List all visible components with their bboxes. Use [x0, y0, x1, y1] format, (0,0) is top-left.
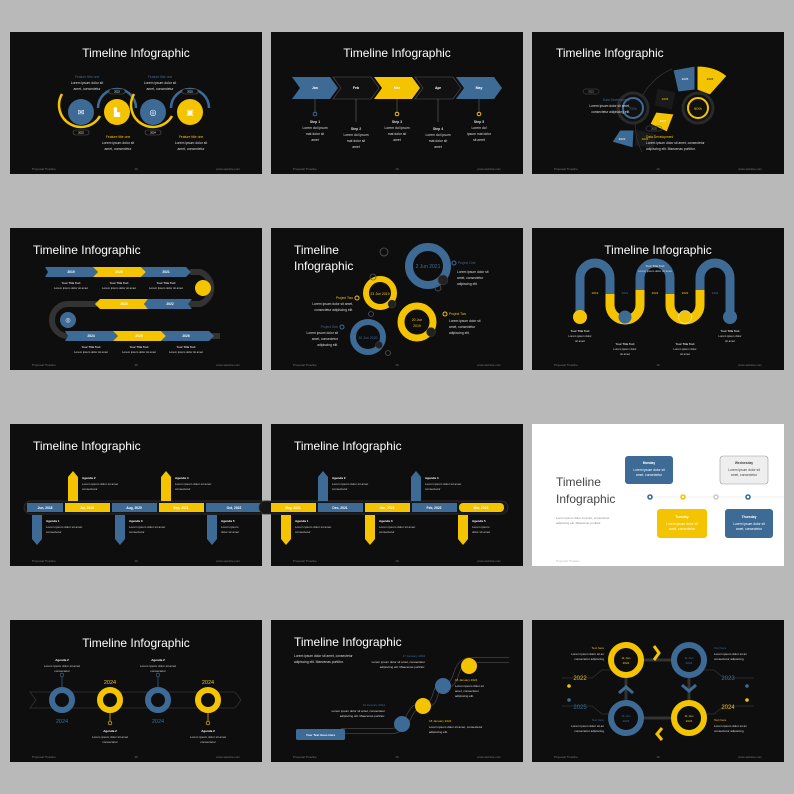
slide 3: gear segments: 2026 [662, 97, 669, 101]
slide 8: agenda bar part 2 [259, 424, 523, 566]
slide 12: four ring cycle [532, 620, 784, 762]
steps text: Lorem dol [471, 126, 487, 130]
title: Timeline Infographic [343, 46, 451, 60]
slide 11: winding road: 17 January 2024 [403, 654, 425, 658]
slide 4: serpentine arrows: ◎ [65, 318, 71, 324]
text blocks: Data Development [646, 135, 673, 139]
slide 9: white weekday timeline: Thursday [742, 515, 757, 519]
arrows [318, 471, 328, 501]
slide 10: ring chain: Lorem ipsum dolor sit amet [44, 664, 80, 668]
slide 11: winding road: adipiscing elit. [455, 694, 474, 698]
slide 9: white weekday timeline: Tuesday [675, 515, 689, 519]
connectors [562, 660, 754, 718]
title: Timeline Infographic [33, 439, 141, 453]
bar [259, 501, 508, 514]
slide 4: serpentine arrows: 2021 [162, 270, 170, 274]
title: Timeline Infographic [294, 439, 402, 453]
slide 4: serpentine arrows: 2020 [115, 270, 123, 274]
slide 7: agenda bar part 1: Jul, 2019 [80, 506, 94, 510]
slide 9: white weekday timeline: Wednesday [735, 461, 753, 465]
slide 5: bubbles: Infographic [294, 259, 353, 273]
slide 6: snake timeline: Your Title Text [616, 342, 635, 346]
slide 4: serpentine arrows: 2023 [120, 302, 128, 306]
slide 12: four ring cycle: 11 Jan [685, 714, 694, 718]
labels: Lorem ipsum dolor sit [306, 331, 338, 335]
steps text [302, 120, 492, 149]
slide 11: winding road: Lorem ipsum dolor sit [455, 684, 484, 688]
title: Timeline Infographic [604, 243, 712, 257]
slide 5: bubbles: 2019 [413, 324, 421, 328]
slide 4: serpentine arrows: 2022 [166, 302, 174, 306]
feature texts: Lorem ipsum dolor sit [175, 141, 207, 145]
slide 9: white weekday timeline: amet, consectetur [736, 527, 763, 531]
feature texts: amet, consectetur [74, 87, 101, 91]
slide 4: serpentine arrows: Lorem ipsum dolor sit amet [149, 286, 183, 290]
slide 8: agenda bar part 2: Agenda 1 [295, 519, 309, 523]
slide 7: agenda bar part 1: Agenda 3 [129, 519, 143, 523]
feature texts: amet, consectetur [147, 87, 174, 91]
slide 9: white weekday timeline: Lorem ipsum dolor sit [728, 468, 760, 472]
circles: ◎ [150, 108, 157, 117]
slide 2: chevron months: Jan [312, 86, 318, 90]
slide 4: serpentine arrows: Lorem ipsum dolor sit amet [74, 350, 108, 354]
slide 12: four ring cycle: 2024 [686, 719, 693, 723]
slide 7: agenda bar part 1: consectetur [175, 487, 191, 491]
slide 8: agenda bar part 2: Agenda 2 [332, 476, 346, 480]
slide 11: winding road: Lorem ipsum dolor sit amet, consectetur [332, 709, 385, 713]
nodes [394, 716, 410, 732]
text blocks: Lorem ipsum dolor sit amet, consectetur [646, 141, 706, 145]
slide 9: white weekday timeline: adipiscing elit. Maecenas porttitor. [556, 521, 601, 525]
slide 7: agenda bar part 1: Lorem ipsum dolor sit amet [175, 482, 211, 486]
track [52, 272, 220, 336]
slide 7: agenda bar part 1: consectetur [46, 530, 62, 534]
slide 10: ring chain: Lorem ipsum dolor sit amet [190, 735, 226, 739]
slide 6: snake timeline: Lorem ipsum dolor [613, 347, 637, 351]
slide 8: agenda bar part 2: Agenda 4 [425, 476, 439, 480]
slide 9: white weekday timeline [532, 424, 784, 566]
slide 9: white weekday timeline: Lorem ipsum dolor sit [733, 522, 765, 526]
nodes [573, 310, 587, 324]
slide 8: agenda bar part 2: Lorem ipsum dolor sit amet [425, 482, 461, 486]
slide 7: agenda bar part 1: Lorem ipsum [221, 525, 239, 529]
slide 6: snake timeline: sit amet [680, 352, 690, 356]
slide 9: white weekday timeline: Lorem ipsum dolor sit [633, 468, 665, 472]
slide 6: snake timeline: 2021 [622, 291, 629, 295]
circles: ▙ [113, 107, 121, 117]
slide 4: serpentine arrows: Lorem ipsum dolor sit amet [122, 350, 156, 354]
slide 8: agenda bar part 2: consectetur [379, 530, 395, 534]
labels: adipiscing elit. [317, 343, 338, 347]
arrows [68, 471, 78, 501]
slide 6: snake timeline: sit amet [575, 339, 585, 343]
slide 4: serpentine arrows: 2019 [67, 270, 75, 274]
slide 8: agenda bar part 2: Agenda 5 [472, 519, 486, 523]
slide 8: agenda bar part 2: May, 2021 [285, 506, 301, 510]
labels: Lorem ipsum dolor sit [449, 319, 481, 323]
steps text: amet [352, 145, 360, 149]
labels [306, 261, 489, 347]
slide 8: agenda bar part 2: Agenda 3 [379, 519, 393, 523]
slide 11: winding road: amet, consectetur [455, 689, 479, 693]
slide 11: winding road: Lorem ipsum dolor sit amet, consectetur [429, 725, 482, 729]
chevron band [30, 692, 241, 708]
slide 8: agenda bar part 2: consectetur [332, 487, 348, 491]
icons [195, 280, 211, 296]
slide 2: chevron months: May [476, 86, 482, 90]
slide 12: four ring cycle: Lorem ipsum dolor sit an [714, 652, 747, 656]
steps text: amet [311, 138, 319, 142]
rings [52, 690, 218, 710]
slide 11: winding road: Lorem ipsum dolor sit amet, consectetur [372, 660, 425, 664]
slide 8: agenda bar part 2: Dec, 2021 [332, 506, 348, 510]
slide 11: winding road: 19 January 2024 [363, 703, 385, 707]
slide 12: four ring cycle: 11 Jan [622, 714, 631, 718]
slide 8: agenda bar part 2: Lorem ipsum dolor sit amet [295, 525, 331, 529]
slide 8: agenda bar part 2: Mar, 2022 [474, 506, 489, 510]
slide 8: agenda bar part 2: Jan, 2022 [380, 506, 395, 510]
labels: amet, consectetur [449, 325, 476, 329]
slide 6: snake timeline: sit amet [620, 352, 630, 356]
slide 12: four ring cycle: Text here [714, 718, 727, 722]
slide 6: snake timeline [532, 228, 784, 370]
slide 6: snake timeline: Lorem ipsum dolor [673, 347, 697, 351]
slide 9: white weekday timeline: amet, consectetur [636, 473, 663, 477]
slide 10: ring chain: consectetur [102, 740, 118, 744]
labels: amet, consectetur [312, 337, 339, 341]
slide 9: white weekday timeline: Proposal Timeline [556, 559, 580, 563]
rings [611, 645, 704, 733]
slide 6: snake timeline: Your Title Text [676, 342, 695, 346]
chevrons [619, 646, 696, 740]
slide 7: agenda bar part 1: dolor sit amet [221, 530, 239, 534]
slide 10: ring chain: Agenda 2 [103, 729, 117, 733]
slide 7: agenda bar part 1: Agenda 1 [46, 519, 60, 523]
slide 4: serpentine arrows: 2024 [87, 334, 95, 338]
slide 6: snake timeline: 2024 [712, 291, 719, 295]
slide 10: ring chain: 2024 [202, 680, 214, 686]
steps text: amet [393, 138, 401, 142]
title: Timeline [294, 243, 339, 257]
slide 7: agenda bar part 1 [10, 424, 274, 566]
slide 7: agenda bar part 1: Lorem ipsum dolor sit amet [46, 525, 82, 529]
slide 10: ring chain: 2024 [56, 719, 68, 725]
road [341, 660, 509, 731]
title: Timeline Infographic [33, 243, 141, 257]
slide 6: snake timeline: Lorem ipsum dolor [718, 334, 742, 338]
steps text: Lorem dol ipsum [425, 133, 451, 137]
slide 3: gear segments: 2026 [707, 77, 714, 81]
slide 1: circular feature timeline [10, 32, 262, 174]
years: 2025 [573, 705, 587, 711]
slide 6: snake timeline: Your Title Text [571, 329, 590, 333]
labels: consectetur adipiscing elit. [314, 308, 353, 312]
feature texts: Lorem ipsum dolor sit [102, 141, 134, 145]
arcs [59, 89, 209, 127]
slide 11: winding road: 18 January 2024 [455, 678, 478, 682]
slide 4: serpentine arrows: Lorem ipsum dolor sit amet [54, 286, 88, 290]
labels: Project Two [336, 296, 353, 300]
slide 10: ring chain: Agenda 2 [151, 658, 165, 662]
slide 12: four ring cycle: Text here [714, 646, 727, 650]
text blocks: Lorem ipsum dolor sit amet, [589, 104, 630, 108]
slide 5: bubbles: 23 Jun 2019 [370, 292, 390, 296]
slide 12: four ring cycle: consectetur adipiscing [574, 729, 604, 733]
slide 8: agenda bar part 2: dolor sit amet [472, 530, 490, 534]
labels: Project One [321, 325, 338, 329]
slide 7: agenda bar part 1: consectetur [129, 530, 145, 534]
slide 8: agenda bar part 2: consectetur [425, 487, 441, 491]
slide 7: agenda bar part 1: Aug, 2020 [126, 506, 142, 510]
snake [580, 263, 730, 320]
feature texts: amet, consectetur [178, 147, 205, 151]
steps text: mat dolor sit [388, 132, 406, 136]
gauges [618, 93, 648, 123]
circles: ▣ [186, 108, 194, 117]
slide 2: chevron months: Feb [353, 86, 359, 90]
steps text: mat dolor sit [429, 139, 447, 143]
slide 2: chevron months: Apr [435, 86, 442, 90]
slide 3: gear segments: 2025 [682, 77, 689, 81]
steps text: Step 2 [351, 127, 361, 131]
title: Timeline Infographic [82, 636, 190, 650]
slide 3: gear segments: 2023 [619, 137, 626, 141]
slide 12: four ring cycle: 2024 [686, 661, 693, 665]
slide 10: ring chain: Lorem ipsum dolor sit amet [92, 735, 128, 739]
slide 9: white weekday timeline: Lorem ipsum dolor sit [666, 522, 698, 526]
slide 10: ring chain: 2024 [104, 680, 116, 686]
slide 8: agenda bar part 2: Lorem ipsum dolor sit amet [379, 525, 415, 529]
slide 12: four ring cycle: Text here [592, 646, 604, 650]
slide 6: snake timeline: sit amet [725, 339, 735, 343]
text blocks: 2023 [588, 90, 594, 94]
slide 11: winding road: Your Text Goes Here [306, 733, 335, 737]
slide 7: agenda bar part 1: Sep, 2021 [173, 506, 189, 510]
slide 12: four ring cycle: 11 Jan [622, 656, 631, 660]
slide 4: serpentine arrows [10, 228, 262, 370]
slide 3: gear segments: 75% [629, 106, 637, 111]
bar [24, 501, 274, 514]
slide 10: ring chain: Agenda 2 [55, 658, 69, 662]
slide 12: four ring cycle: consectetur adipiscing [714, 729, 744, 733]
slide 11: winding road [271, 620, 523, 762]
stems and markers [315, 99, 479, 122]
slide 11: winding road: adipiscing elit. Maecenas porttitor. [380, 665, 425, 669]
steps text: sit amet [473, 138, 485, 142]
slide 1: circular feature timeline: 2023 [114, 90, 120, 94]
slide 5: bubbles: 20 Jun [412, 318, 422, 322]
years: 2024 [721, 705, 735, 711]
slide 4: serpentine arrows: 2026 [182, 334, 190, 338]
steps text: Step 1 [310, 120, 320, 124]
slide 3: gear segments: 2027 [660, 119, 667, 123]
slide 6: snake timeline: 2023 [682, 291, 689, 295]
slide 10: ring chain: consectetur [54, 669, 70, 673]
feature texts: Lorem ipsum dolor sit [71, 81, 103, 85]
slide 10: ring chain: consectetur [200, 740, 216, 744]
slide 6: snake timeline: Lorem ipsum dolor [568, 334, 592, 338]
feature texts: Feature title one [148, 75, 172, 79]
text blocks: Data Development [603, 98, 630, 102]
slide 12: four ring cycle: Lorem ipsum dolor sit an [571, 724, 604, 728]
slide 10: ring chain: Lorem ipsum dolor sit amet [140, 664, 176, 668]
slide 10: ring chain: consectetur [150, 669, 166, 673]
slide 5: bubbles [271, 228, 523, 370]
slide 7: agenda bar part 1: Jun, 2018 [37, 506, 53, 510]
slide 11: winding road: adipiscing elit. [429, 730, 448, 734]
steps text: Lorem dol ipsum [343, 133, 369, 137]
slide 8: agenda bar part 2: Lorem ipsum dolor sit amet [332, 482, 368, 486]
feature texts: Lorem ipsum dolor sit [144, 81, 176, 85]
slide 12: four ring cycle: 2024 [623, 719, 630, 723]
title: Timeline Infographic [294, 635, 402, 649]
slide 8: agenda bar part 2: Feb, 2022 [426, 506, 442, 510]
slide 6: snake timeline: 2022 [652, 291, 659, 295]
slide 1: circular feature timeline: 2022 [78, 132, 84, 134]
slide 9: white weekday timeline: Infographic [556, 492, 615, 506]
slide 1: circular feature timeline: 2024 [150, 132, 156, 134]
slide 12: four ring cycle: 2024 [623, 661, 630, 665]
slide 4: serpentine arrows: 2025 [135, 334, 143, 338]
steps text: Lorem dol ipsum [384, 126, 410, 130]
slide 2: chevron months [271, 32, 523, 174]
feature texts: amet, consectetur [105, 147, 132, 151]
years: 2023 [721, 676, 735, 682]
circles [68, 99, 203, 125]
slide 7: agenda bar part 1: Lorem ipsum dolor sit amet [82, 482, 118, 486]
slide 7: agenda bar part 1: Agenda 2 [82, 476, 96, 480]
labels: adipiscing elit. [449, 331, 470, 335]
slide 7: agenda bar part 1: Lorem ipsum dolor sit amet [129, 525, 165, 529]
slide 4: serpentine arrows: Lorem ipsum dolor sit amet [102, 286, 136, 290]
slide 11: winding road: adipiscing elit. Maecenas porttitor. [294, 660, 344, 664]
labels: Lorem ipsum dolor sit amet, [312, 302, 353, 306]
button [296, 729, 345, 740]
labels: amet, consectetur [457, 276, 484, 280]
steps text: Step 5 [474, 120, 484, 124]
slide 1: circular feature timeline: 2025 [187, 90, 193, 94]
labels: Project Two [449, 312, 466, 316]
year pills [73, 89, 198, 135]
feature texts [71, 75, 207, 151]
slide 2: chevron months: Mar [394, 86, 401, 90]
steps text: mat dolor sit [306, 132, 324, 136]
slide 7: agenda bar part 1: Oct, 2022 [227, 506, 241, 510]
slide 10: ring chain: Agenda 2 [201, 729, 215, 733]
slide 11: winding road: adipiscing elit. Maecenas porttitor. [340, 714, 385, 718]
labels: Project One [458, 261, 476, 265]
slide 12: four ring cycle: Lorem ipsum dolor sit an [714, 724, 747, 728]
slide 6: snake timeline: Lorem ipsum dolor sit amet [638, 269, 672, 273]
steps text: amet [434, 145, 442, 149]
segments [612, 66, 727, 148]
years [573, 676, 735, 711]
title: Timeline Infographic [82, 46, 190, 60]
slide 7: agenda bar part 1: Agenda 4 [175, 476, 189, 480]
slide 8: agenda bar part 2: Lorem ipsum [472, 525, 490, 529]
slide 9: white weekday timeline: amet, consectetur [731, 473, 758, 477]
arrows [45, 267, 214, 341]
boxes [625, 456, 673, 484]
steps text: Lorem dol ipsum [302, 126, 328, 130]
slide 11: winding road: Lorem ipsum dolor sit amet, consectetur [294, 654, 354, 658]
slide 5: bubbles: 20 Jun 2020 [358, 336, 378, 340]
circles: ✉ [78, 108, 85, 117]
feature texts: Feature title one [75, 75, 99, 79]
slide 4: serpentine arrows: Your Title Text [157, 281, 176, 285]
slide 6: snake timeline: 2019 [592, 291, 599, 295]
slide 10: ring chain: 2024 [152, 719, 164, 725]
slide 4: serpentine arrows: Your Title Text [82, 345, 101, 349]
slide 11: winding road: 18 January 2024 [429, 719, 452, 723]
labels: adipiscing elit. [457, 282, 478, 286]
slide 12: four ring cycle: 11 Jan [685, 656, 694, 660]
slide 9: white weekday timeline: Lorem ipsum dolor sit amet, consectetur [556, 516, 609, 520]
slide 3: gear segments [532, 32, 784, 174]
slide 8: agenda bar part 2: consectetur [295, 530, 311, 534]
slide 4: serpentine arrows: Lorem ipsum dolor sit amet [169, 350, 203, 354]
text blocks: adipiscing elit. Maecenas porttitor. [646, 147, 696, 151]
slide 4: serpentine arrows: Your Title Text [177, 345, 196, 349]
labels: Lorem ipsum dolor sit [457, 270, 489, 274]
years: 2022 [573, 676, 587, 682]
steps text: Step 3 [392, 120, 402, 124]
slide 6: snake timeline: Your Title Text [646, 264, 665, 268]
title: Timeline Infographic [556, 46, 664, 60]
slide 9: white weekday timeline: amet, consectetur [669, 527, 696, 531]
slide 4: serpentine arrows: Your Title Text [130, 345, 149, 349]
slide 6: snake timeline: Your Title Text [721, 329, 740, 333]
title: Timeline [556, 475, 601, 489]
chevrons [292, 77, 502, 99]
slide 12: four ring cycle: consectetur adipiscing [574, 657, 604, 661]
slide 9: white weekday timeline: Monday [643, 461, 655, 465]
steps text: Step 4 [433, 127, 443, 131]
slide 10: ring chain [10, 620, 262, 762]
slide 3: gear segments: 2024 [642, 137, 649, 141]
slide 12: four ring cycle: Lorem ipsum dolor sit an [571, 652, 604, 656]
slide 7: agenda bar part 1: Agenda 5 [221, 519, 235, 523]
slide 12: four ring cycle: Text here [592, 718, 604, 722]
dots line [642, 496, 784, 498]
feature texts: Feature title one [106, 135, 130, 139]
slide 4: serpentine arrows: Your Title Text [110, 281, 129, 285]
slide 5: bubbles: 2 Jun 2021 [416, 264, 441, 270]
steps text: mat dolor sit [347, 139, 365, 143]
text blocks: 2025 [651, 128, 657, 130]
slide 4: serpentine arrows: Your Title Text [62, 281, 81, 285]
slide 12: four ring cycle: consectetur adipiscing [714, 657, 744, 661]
rings [353, 247, 447, 356]
slide 7: agenda bar part 1: consectetur [82, 487, 98, 491]
text blocks [583, 89, 706, 151]
feature texts: Feature title one [179, 135, 203, 139]
slide 3: gear segments: 90% [694, 106, 702, 111]
text blocks: consectetur adipiscing elit. [591, 110, 630, 114]
steps text: ipsum mat dolor [467, 132, 492, 136]
